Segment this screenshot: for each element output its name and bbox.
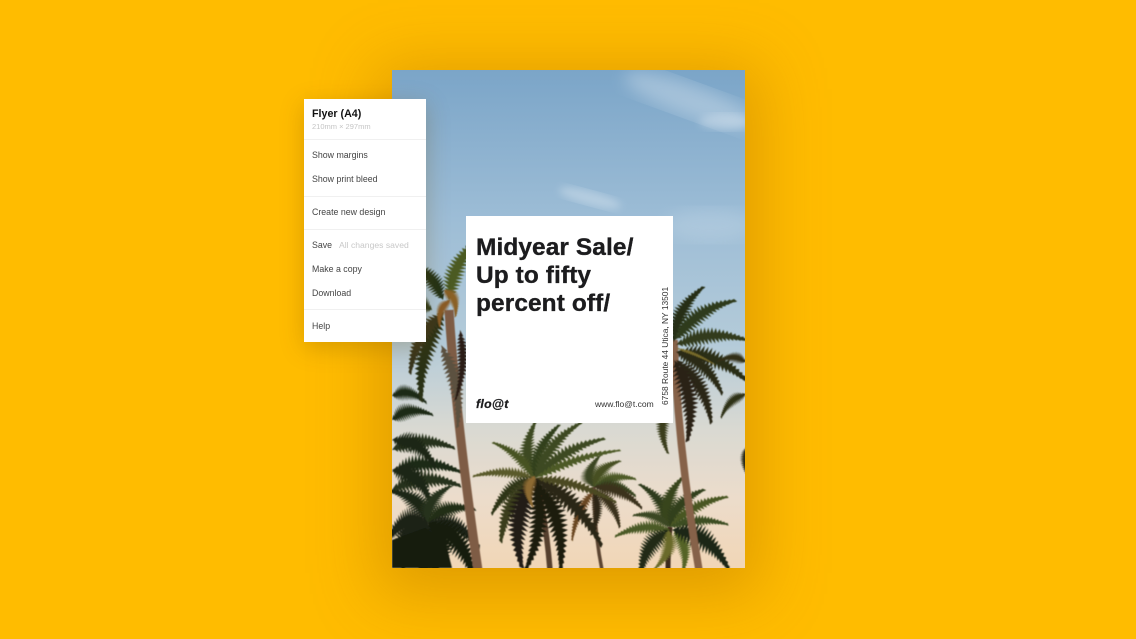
heading: sale title: percent off/ [476, 290, 610, 316]
panel: editor dropdown menu [304, 99, 426, 342]
menu heading: Flyer (A4): Flyer (A4) [312, 108, 361, 120]
clouds [557, 61, 761, 241]
palm: centre [472, 411, 621, 571]
menu status: all changes saved: All changes saved [339, 240, 409, 250]
heading: sale title: Up to fifty [476, 262, 591, 288]
palm: far left upper fronds [385, 382, 461, 506]
palm: tall right with trunk [650, 279, 755, 570]
palm: tall left with trunk [391, 227, 484, 570]
menu item: download: Download [312, 288, 351, 298]
palm: small behind centre [560, 450, 647, 570]
menu item: save: Save [312, 240, 332, 250]
menu item: help: Help [312, 321, 330, 331]
palm: lower right [615, 475, 741, 579]
menu item: make a copy: Make a copy [312, 264, 362, 274]
heading: sale title [476, 234, 634, 316]
heading: sale title: Midyear Sale/ [476, 234, 633, 260]
panel: flyer poster with palm tree photo [392, 70, 745, 568]
text: website: www.flo@t.com [595, 399, 654, 409]
palm: lower left cluster [375, 473, 496, 583]
menu item: create new design: Create new design [312, 207, 385, 217]
palm: right edge fronds [713, 347, 755, 481]
sky background [392, 70, 745, 568]
menu subheading: dimensions: 210mm × 297mm [312, 122, 371, 131]
panel: white flyer card [466, 216, 673, 423]
menu item: show margins: Show margins [312, 150, 368, 160]
logo: flo@t: flo@t [476, 397, 509, 411]
text: vertical address: 6758 Route 44 Utica, NY 13501 [660, 287, 670, 405]
menu item: show print bleed: Show print bleed [312, 174, 378, 184]
